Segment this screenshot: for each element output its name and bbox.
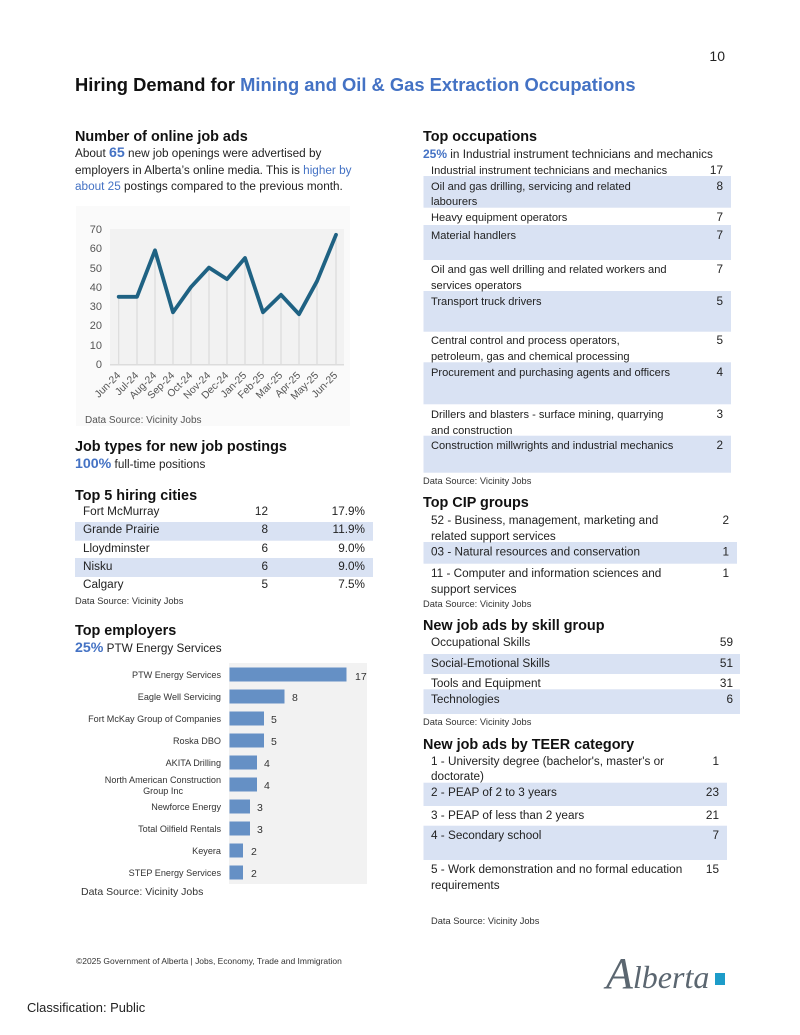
callout: full-time share: 100% full-time positions bbox=[75, 456, 205, 472]
table: occupations: Oil and gas drilling, servicing and related bbox=[431, 181, 631, 193]
line chart: monthly online job ads: 30 bbox=[90, 301, 102, 313]
table: occupations: Central control and process operators, bbox=[431, 335, 620, 347]
table: TEER categories: 21 bbox=[706, 809, 719, 822]
table: hiring cities: Nisku bbox=[83, 560, 112, 573]
bar chart: top employers: STEP Energy Services bbox=[129, 868, 221, 878]
bar chart: top employers: 2 bbox=[251, 868, 257, 880]
line chart: monthly online job ads: Jan-25 bbox=[219, 370, 249, 400]
data source: Data Source: Vicinity Jobs bbox=[81, 886, 203, 898]
panel: number of online job ads bbox=[75, 129, 352, 426]
line chart: monthly online job ads: Jun-24 bbox=[93, 370, 123, 400]
line chart: monthly online job ads: 10 bbox=[90, 340, 102, 352]
table: hiring cities: Grande Prairie bbox=[83, 523, 160, 536]
table: occupations: Material handlers bbox=[431, 230, 517, 242]
table: TEER categories: requirements bbox=[431, 879, 500, 892]
table: hiring cities: 6 bbox=[261, 542, 268, 555]
table: hiring cities: Fort McMurray bbox=[83, 505, 160, 518]
heading: number of online job ads: Number of online job ads bbox=[75, 129, 248, 145]
line chart: monthly online job ads: 60 bbox=[90, 243, 102, 255]
bar chart: top employers: Newforce Energy bbox=[151, 802, 221, 812]
table: skill groups bbox=[424, 636, 740, 714]
table: skill groups: 6 bbox=[726, 693, 733, 706]
line chart: monthly online job ads: Apr-25 bbox=[273, 370, 303, 400]
table: occupations: Heavy equipment operators bbox=[431, 212, 568, 224]
table: hiring cities: Calgary bbox=[83, 578, 124, 591]
line chart: monthly online job ads bbox=[76, 206, 350, 426]
table: occupations: and construction bbox=[431, 425, 512, 437]
table: hiring cities: 7.5% bbox=[338, 578, 366, 591]
heading: TEER category: New job ads by TEER category bbox=[423, 737, 634, 753]
table: CIP groups: support services bbox=[431, 583, 517, 596]
bar chart: top employers: Total Oilfield Rentals bbox=[138, 824, 221, 834]
bar chart: top employers: 8 bbox=[292, 692, 298, 704]
table: TEER categories: 7 bbox=[712, 829, 719, 842]
bar chart: top employers: 4 bbox=[264, 758, 270, 770]
table: occupations: 4 bbox=[716, 366, 723, 379]
line chart: monthly online job ads: Oct-24 bbox=[165, 370, 195, 400]
table: TEER categories bbox=[424, 755, 727, 892]
line chart: monthly online job ads: 70 bbox=[90, 224, 102, 236]
page number: 10 bbox=[709, 48, 725, 64]
table: occupations: Procurement and purchasing agents and officers bbox=[431, 367, 671, 379]
table: occupations: 8 bbox=[716, 180, 723, 193]
callout: top occupation share: 25% in Industrial instrument technicians and mechanics bbox=[423, 147, 713, 161]
table: CIP groups: 1 bbox=[722, 546, 729, 558]
icon: Alberta logo: Alberta bbox=[603, 949, 709, 998]
table: TEER categories: 5 - Work demonstration and no formal education bbox=[431, 863, 682, 876]
panel: new job ads by TEER category bbox=[423, 737, 727, 926]
table: hiring cities: 12 bbox=[255, 505, 268, 518]
table: occupations: 5 bbox=[716, 334, 723, 347]
line chart: monthly online job ads: May-25 bbox=[289, 370, 321, 402]
table: CIP groups: 1 bbox=[722, 567, 729, 580]
table: CIP groups: 2 bbox=[722, 514, 729, 527]
heading: top employers: Top employers bbox=[75, 623, 176, 639]
line chart: monthly online job ads: Data Source: Vicinity Jobs bbox=[85, 415, 202, 426]
data source: Data Source: Vicinity Jobs bbox=[75, 596, 184, 606]
heading: top CIP groups: Top CIP groups bbox=[423, 495, 529, 511]
bar chart: top employers: 5 bbox=[271, 714, 277, 726]
table: occupations: Transport truck drivers bbox=[431, 296, 542, 308]
heading: job types: Job types for new job postings bbox=[75, 439, 287, 455]
data source: Data Source: Vicinity Jobs bbox=[423, 599, 532, 609]
table: occupations: 3 bbox=[716, 408, 723, 421]
bar chart: top employers: Roska DBO bbox=[173, 736, 221, 746]
table: occupations: labourers bbox=[431, 196, 478, 208]
title: Hiring Demand for Mining and Oil & Gas Extraction Occupations bbox=[75, 74, 636, 95]
line chart: monthly online job ads: 40 bbox=[90, 282, 102, 294]
line chart: monthly online job ads: Jul-24 bbox=[114, 370, 141, 398]
bar chart: top employers: PTW Energy Services bbox=[132, 670, 221, 680]
table: occupations: services operators bbox=[431, 280, 522, 292]
table: CIP groups: 52 - Business, management, marketing and bbox=[431, 514, 658, 527]
table: occupations: 7 bbox=[716, 211, 723, 224]
table: hiring cities: Lloydminster bbox=[83, 542, 150, 555]
table: skill groups: Technologies bbox=[431, 693, 500, 706]
table: skill groups: Occupational Skills bbox=[431, 636, 530, 649]
panel: top employers bbox=[75, 623, 367, 898]
table: CIP groups bbox=[424, 514, 737, 596]
line chart: monthly online job ads: 50 bbox=[90, 263, 102, 275]
bar chart: top employers: 3 bbox=[257, 824, 263, 836]
table: occupations: Construction millwrights and industrial mechanics bbox=[431, 440, 674, 452]
table: hiring cities: 9.0% bbox=[338, 560, 366, 573]
bar chart: top employers: 5 bbox=[271, 736, 277, 748]
table: skill groups: 51 bbox=[720, 657, 733, 670]
panel: top 5 hiring cities bbox=[75, 488, 373, 606]
table: occupations: Drillers and blasters - surface mining, quarrying bbox=[431, 409, 663, 421]
bar chart: top employers: Fort McKay Group of Companies bbox=[88, 714, 221, 724]
bar chart: top employers: AKITA Drilling bbox=[166, 758, 221, 768]
footer copyright: ©2025 Government of Alberta | Jobs, Economy, Trade and Immigration bbox=[76, 956, 342, 966]
heading: top 5 hiring cities: Top 5 hiring cities bbox=[75, 488, 197, 504]
table: TEER categories: 4 - Secondary school bbox=[431, 829, 541, 842]
table: hiring cities: 5 bbox=[261, 578, 268, 591]
table: skill groups: 31 bbox=[720, 677, 733, 690]
panel: new job ads by skill group bbox=[423, 618, 740, 727]
bar chart: top employers: Group Inc bbox=[143, 786, 183, 796]
bar chart: top employers: 17 bbox=[355, 671, 367, 683]
table: hiring cities: 17.9% bbox=[332, 505, 366, 518]
table: hiring cities: 9.0% bbox=[338, 542, 366, 555]
text block: job ads summary: employers in Alberta’s online media. This is higher by bbox=[75, 164, 352, 177]
table: TEER categories: 3 - PEAP of less than 2 years bbox=[431, 809, 584, 822]
table: TEER categories: 23 bbox=[706, 786, 719, 799]
classification label: Classification: Public bbox=[27, 1000, 146, 1015]
table: occupations: 7 bbox=[716, 229, 723, 242]
line chart: monthly online job ads: Aug-24 bbox=[128, 370, 159, 402]
heading: top occupations: Top occupations bbox=[423, 129, 537, 145]
bar chart: top employers: 2 bbox=[251, 846, 257, 858]
bar chart: top employers: 3 bbox=[257, 802, 263, 814]
table: CIP groups: 11 - Computer and information sciences and bbox=[431, 567, 661, 580]
table: hiring cities: 6 bbox=[261, 560, 268, 573]
table: occupations bbox=[424, 164, 731, 473]
table: hiring cities: 8 bbox=[261, 523, 268, 536]
table: CIP groups: 03 - Natural resources and conservation bbox=[431, 546, 640, 558]
panel: top occupations bbox=[423, 129, 731, 486]
callout: top employer share: 25% PTW Energy Services bbox=[75, 640, 222, 656]
line chart: monthly online job ads: Nov-24 bbox=[182, 370, 213, 402]
table: occupations: 17 bbox=[710, 164, 723, 177]
table: occupations: 7 bbox=[716, 263, 723, 276]
table: occupations: Oil and gas well drilling and related workers and bbox=[431, 264, 667, 276]
data source: Data Source: Vicinity Jobs bbox=[423, 717, 532, 727]
table: occupations: 2 bbox=[716, 439, 723, 452]
heading: skill group: New job ads by skill group bbox=[423, 618, 605, 634]
table: hiring cities bbox=[75, 505, 373, 591]
table: TEER categories: 15 bbox=[706, 863, 719, 876]
table: TEER categories: 1 - University degree (bachelor's, master's or bbox=[431, 755, 664, 768]
bar chart: top employers bbox=[88, 663, 367, 884]
text block: job ads summary: About 65 new job openings were advertised by bbox=[75, 145, 321, 161]
panel: job types bbox=[75, 439, 287, 472]
table: skill groups: Social-Emotional Skills bbox=[431, 657, 550, 670]
bar chart: top employers: North American Construction bbox=[105, 775, 221, 785]
panel: top CIP groups bbox=[423, 495, 737, 609]
line chart: monthly online job ads: 20 bbox=[90, 320, 102, 332]
bar chart: top employers: Keyera bbox=[192, 846, 222, 856]
line chart: monthly online job ads: Dec-24 bbox=[200, 370, 231, 402]
table: occupations: petroleum, gas and chemical processing bbox=[431, 351, 630, 363]
line chart: monthly online job ads: Feb-25 bbox=[236, 370, 267, 401]
line chart: monthly online job ads: Sep-24 bbox=[146, 370, 177, 402]
table: CIP groups: related support services bbox=[431, 530, 556, 543]
text block: job ads summary bbox=[75, 145, 352, 193]
text block: job ads summary: about 25 postings compared to the previous month. bbox=[75, 180, 343, 193]
bar chart: top employers: 4 bbox=[264, 780, 270, 792]
table: occupations: Industrial instrument technicians and mechanics bbox=[431, 165, 668, 177]
table: hiring cities: 11.9% bbox=[333, 523, 366, 536]
line chart: monthly online job ads: Jun-25 bbox=[310, 370, 340, 400]
table: TEER categories: doctorate) bbox=[431, 770, 484, 783]
table: TEER categories: 2 - PEAP of 2 to 3 years bbox=[431, 786, 557, 799]
data source: Data Source: Vicinity Jobs bbox=[423, 476, 532, 486]
table: skill groups: Tools and Equipment bbox=[431, 677, 541, 690]
line chart: monthly online job ads: 0 bbox=[96, 359, 102, 371]
bar chart: top employers: Eagle Well Servicing bbox=[138, 692, 221, 702]
table: skill groups: 59 bbox=[720, 636, 733, 649]
data source: Data Source: Vicinity Jobs bbox=[431, 916, 540, 926]
line chart: monthly online job ads: Mar-25 bbox=[254, 370, 285, 401]
table: TEER categories: 1 bbox=[712, 755, 719, 768]
table: occupations: 5 bbox=[716, 295, 723, 308]
